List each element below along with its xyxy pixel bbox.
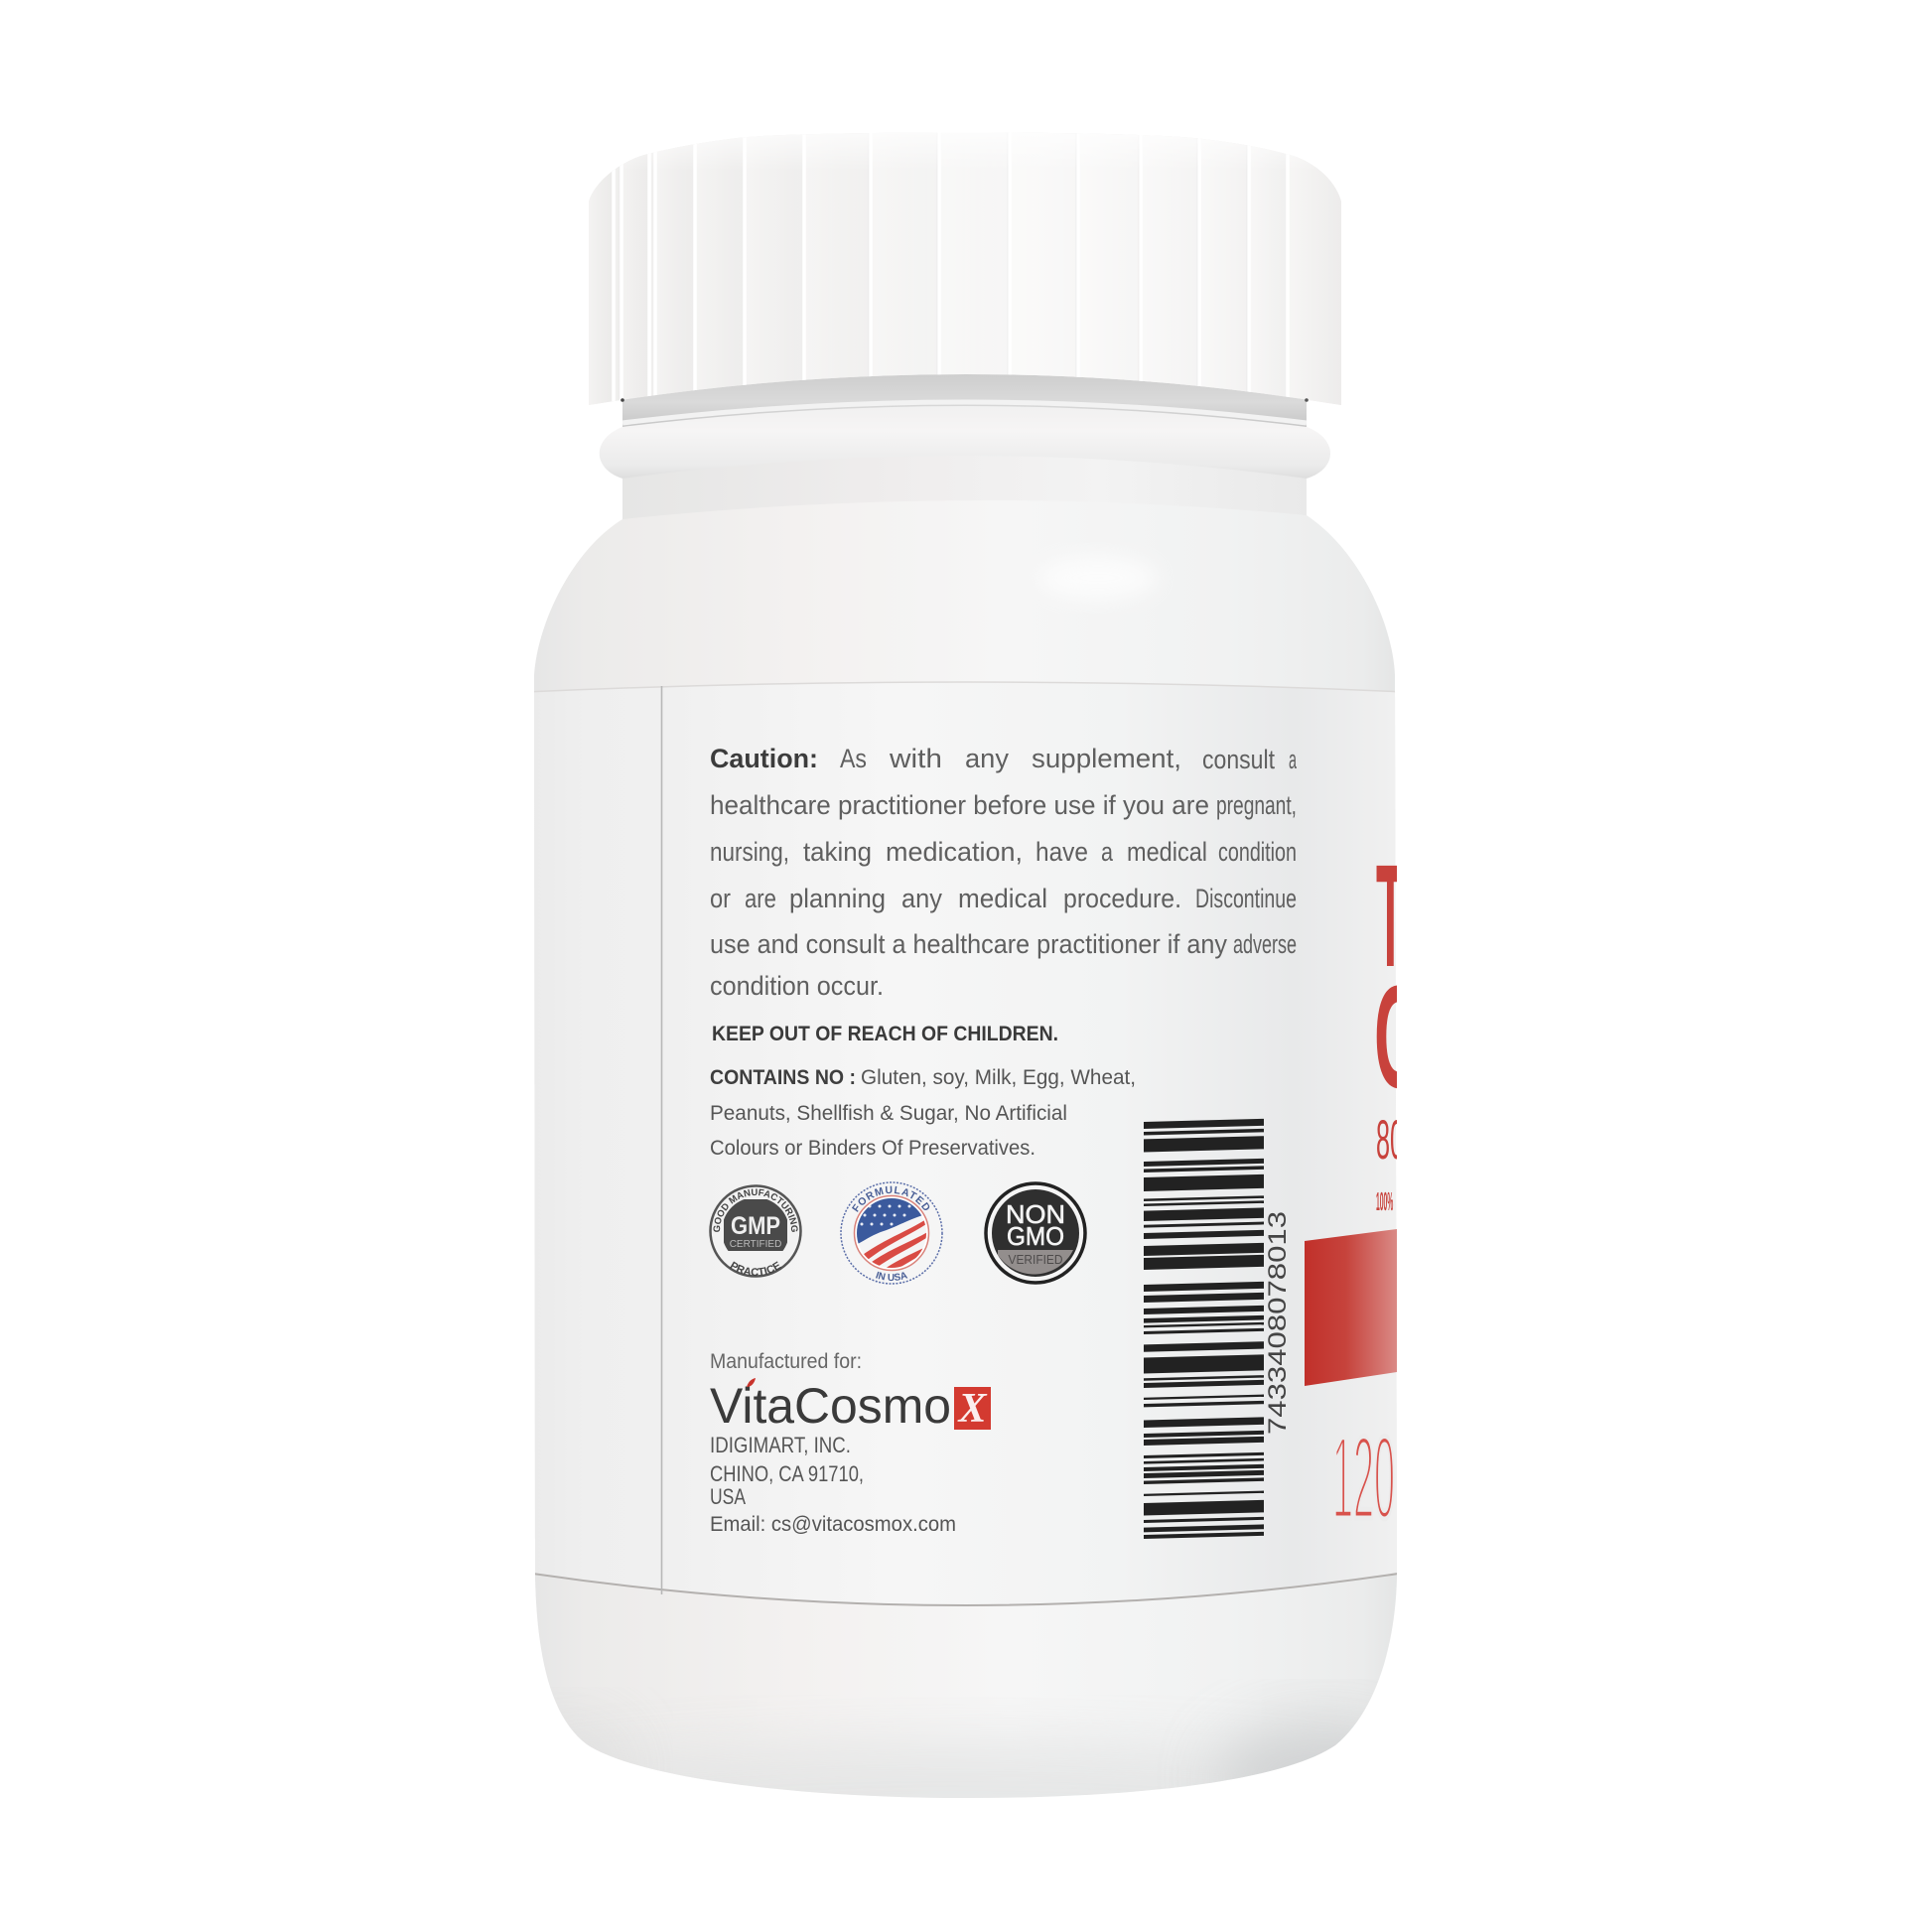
badge: GMP certified: [709, 1184, 802, 1278]
badge: GMP certified: PRACTICE: [730, 1261, 781, 1276]
bottle body: [534, 515, 1397, 1798]
caution paragraph: medical: [958, 884, 1047, 913]
contains no allergen statement: Gluten, soy, Milk, Egg, Wheat,: [861, 1066, 1136, 1089]
capsule count fragment: 120: [1332, 1413, 1395, 1544]
red banner: [1305, 1229, 1397, 1386]
caution paragraph: have: [1035, 837, 1088, 867]
caution paragraph: Discontinue: [1195, 884, 1297, 913]
caution paragraph: with: [889, 744, 942, 773]
caution paragraph: use and consult a healthcare practitioner if any: [710, 929, 1227, 959]
caution paragraph: are: [745, 884, 776, 913]
caution paragraph: any: [901, 884, 942, 913]
caution paragraph: taking: [803, 837, 872, 867]
product name fragment: C: [1374, 956, 1422, 1119]
badge: formulated in USA: FORMULATED: [852, 1185, 929, 1212]
caution paragraph: consult: [1202, 745, 1275, 774]
manufacturer block: CHINO, CA 91710,: [710, 1461, 864, 1486]
brand logo: VitaCosmoX: X: [956, 1386, 987, 1432]
manufacturer block: Manufactured for:: [710, 1350, 862, 1373]
caution paragraph: supplement,: [1032, 744, 1181, 773]
keep out of reach warning: KEEP OUT OF REACH OF CHILDREN.: [712, 1023, 1058, 1045]
badge: non GMO verified: [986, 1183, 1085, 1283]
caution paragraph: or: [710, 884, 731, 913]
caution paragraph: any: [965, 744, 1009, 773]
label panel: [526, 682, 1405, 1605]
badge: formulated in USA: IN USA: [876, 1271, 907, 1281]
caution paragraph: nursing,: [710, 837, 789, 867]
caution paragraph: a: [1289, 745, 1298, 774]
caution paragraph: medication,: [886, 837, 1023, 867]
badge: non GMO verified: VERIFIED: [1009, 1252, 1062, 1267]
badge: non GMO verified: NON: [1006, 1199, 1065, 1229]
contains no allergen statement: Colours or Binders Of Preservatives.: [710, 1137, 1035, 1160]
caution paragraph: condition occur.: [710, 971, 884, 1001]
contains no allergen statement: [710, 1066, 1136, 1160]
caution paragraph: Caution:: [710, 744, 818, 773]
caution paragraph: [710, 744, 1298, 1001]
contains no allergen statement: Peanuts, Shellfish & Sugar, No Artificial: [710, 1102, 1067, 1125]
product name fragment: 100%: [1376, 1188, 1393, 1217]
caution paragraph: planning: [789, 884, 886, 913]
manufacturer block: Email: cs@vitacosmox.com: [710, 1513, 956, 1536]
caution paragraph: adverse: [1233, 929, 1297, 959]
caution paragraph: healthcare practitioner before use if you are: [710, 790, 1209, 820]
caution paragraph: procedure.: [1063, 884, 1181, 913]
badge: GMP certified: CERTIFIED: [730, 1239, 781, 1250]
caution paragraph: medical: [1127, 837, 1207, 867]
product name fragment: 800: [1376, 1110, 1418, 1172]
bottle neck: [622, 367, 1307, 526]
badge: non GMO verified: GMO: [1007, 1221, 1064, 1251]
badge: GMP certified: GMP: [731, 1212, 780, 1240]
contains no allergen statement: CONTAINS NO :: [710, 1066, 856, 1089]
caution paragraph: condition: [1218, 837, 1297, 867]
badge: GMP certified: GOOD MANUFACTURING: [713, 1188, 798, 1232]
caution paragraph: a: [1101, 837, 1114, 867]
manufacturer block: IDIGIMART, INC.: [710, 1433, 851, 1457]
barcode: [1144, 1119, 1292, 1539]
product name fragment: Ta: [1376, 835, 1428, 998]
caution paragraph: As: [840, 744, 867, 773]
manufacturer block: USA: [710, 1484, 746, 1509]
brand logo: VitaCosmoX: VitaCosmo: [710, 1378, 951, 1434]
front label, cropped at bottle edge: [1305, 866, 1397, 1517]
product name fragment: [1376, 866, 1397, 1211]
ribbed cap: [586, 124, 1345, 412]
manufacturer block: [710, 1350, 991, 1536]
badge: formulated in USA: [840, 1181, 943, 1285]
product bottle illustration: [534, 133, 1397, 1798]
barcode: 7433408078013: [1264, 1211, 1292, 1435]
neck ring: [600, 406, 1330, 479]
caution paragraph: pregnant,: [1216, 790, 1297, 820]
